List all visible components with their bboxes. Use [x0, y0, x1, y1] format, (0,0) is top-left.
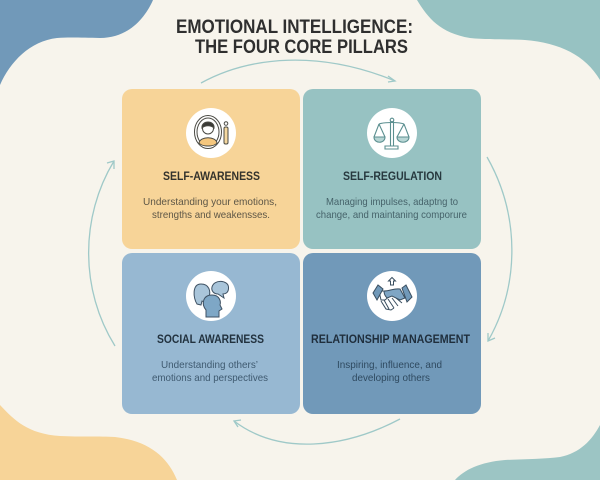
title: EMOTIONAL INTELLIGENCE:: [176, 16, 413, 38]
description: relationship management: Inspiring, influence, and: [337, 360, 442, 371]
description: relationship management: [337, 360, 442, 384]
icon: handshake with up arrow: [373, 278, 412, 310]
description: self-awareness: strengths and weakensses.: [152, 210, 270, 221]
heading: self-awareness: SELF-AWARENESS: [163, 171, 260, 183]
description: social awareness: emotions and perspectives: [152, 373, 268, 384]
panel: social awareness: [122, 253, 300, 414]
description: self-regulation: change, and maintaning comporure: [316, 210, 467, 221]
description: self-awareness: [143, 197, 277, 221]
arrow: left cycle arrow: [89, 161, 115, 346]
panel: self-awareness: [122, 89, 300, 249]
decorative corner: bottom left yellow: [0, 405, 177, 480]
description: self-regulation: Managing impulses, adaptng to: [326, 197, 458, 208]
icon: balance scales: [374, 118, 409, 149]
decorative corner: bottom right teal: [455, 425, 600, 480]
heading: social awareness: SOCIAL AWARENESS: [157, 334, 264, 346]
description: social awareness: [152, 360, 268, 384]
panel: relationship management: [303, 253, 481, 414]
panel: self-regulation: [303, 89, 481, 249]
heading: self-regulation: SELF-REGULATION: [343, 171, 442, 183]
icon: person in mirror: [194, 116, 228, 148]
title: THE FOUR CORE PILLARS: [195, 36, 408, 58]
arrow: right cycle arrow: [487, 157, 512, 341]
description: self-awareness: Understanding your emotions,: [143, 197, 277, 208]
icon: three heads with speech: [194, 281, 229, 317]
description: relationship management: developing others: [352, 373, 430, 384]
decorative corner: top right teal: [417, 0, 600, 80]
decorative corner: top left blue: [0, 0, 153, 85]
title: [176, 16, 413, 58]
arrow: bottom cycle arrow: [234, 419, 400, 444]
arrow: top cycle arrow: [201, 60, 395, 83]
description: social awareness: Understanding others’: [161, 360, 258, 371]
description: self-regulation: [316, 197, 467, 221]
heading: relationship management: RELATIONSHIP MANAGEMENT: [311, 334, 470, 346]
